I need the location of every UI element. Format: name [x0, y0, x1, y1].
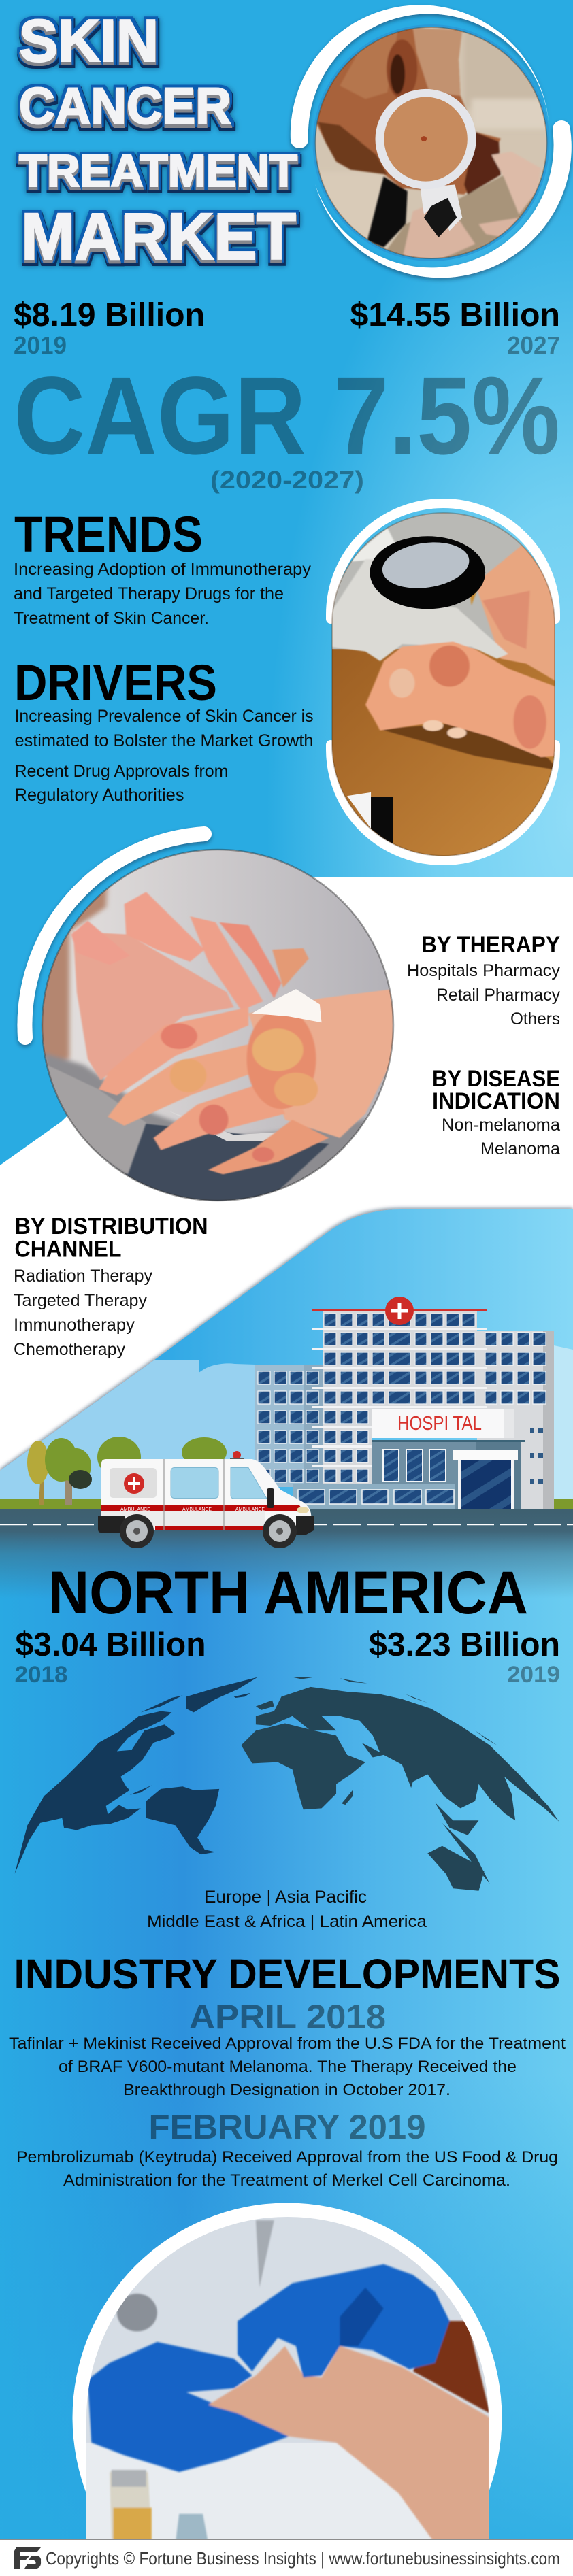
- development: February 2019: Pembrolizumab (Keytruda) Received Approval from the US Food & Drug: [16, 2148, 558, 2167]
- drivers block: Regulatory Authorities: [15, 786, 184, 805]
- segment: by therapy: Retail Pharmacy: [436, 986, 560, 1005]
- trends block: Increasing Adoption of Immunotherapy: [14, 560, 312, 579]
- development: February 2019: Administration for the Treatment of Merkel Cell Carcinoma.: [63, 2171, 510, 2190]
- world map globe: [14, 1677, 559, 1891]
- grass strip: [0, 1499, 573, 1509]
- trends block: [14, 506, 312, 628]
- industry developments heading: INDUSTRY DEVELOPMENTS: [14, 1951, 561, 1997]
- hospital sign text: HOSPI TAL: [397, 1413, 482, 1435]
- regional value 2019: 2019: [507, 1662, 560, 1688]
- pale sky skyline: [0, 1345, 573, 1509]
- segment: by distribution channel: BY DISTRIBUTION: [15, 1214, 208, 1239]
- segment: by disease indication: [432, 1066, 560, 1158]
- market value 2019: 2019: [14, 331, 67, 359]
- regional value 2018: [15, 1626, 206, 1688]
- market value 2027: 2027: [507, 331, 560, 359]
- trends block: TRENDS: [14, 506, 203, 563]
- development: February 2019: [16, 2108, 558, 2190]
- drivers block: estimated to Bolster the Market Growth: [15, 731, 314, 750]
- title: CANCER: [19, 78, 231, 135]
- market value 2019: [14, 297, 205, 359]
- road: [0, 1509, 573, 1599]
- other regions list: Europe | Asia Pacific: [204, 1888, 367, 1907]
- other regions list: [147, 1888, 427, 1931]
- photo: cream on psoriatic hands in circular frame: [24, 834, 402, 1205]
- segment: by therapy: BY THERAPY: [421, 932, 560, 958]
- title: TREATMENT: [19, 146, 297, 197]
- photo: gloved hands examining arm: [72, 2203, 502, 2539]
- ambulance side labels: [120, 1507, 265, 1512]
- regional value 2018: $3.04 Billion: [15, 1626, 206, 1663]
- regional value 2018: 2018: [15, 1662, 68, 1688]
- development: April 2018: of BRAF V600-mutant Melanoma. The Therapy Received the: [59, 2058, 517, 2076]
- segment: by disease indication: INDICATION: [432, 1088, 560, 1114]
- development: April 2018: [9, 1998, 566, 2099]
- title: [19, 7, 297, 273]
- segment: by distribution channel: Chemotherapy: [14, 1340, 125, 1359]
- market value 2027: $14.55 Billion: [350, 297, 560, 333]
- ambulance side labels: AMBULANCE: [120, 1507, 150, 1512]
- segment: by disease indication: BY DISEASE: [432, 1066, 560, 1092]
- segment: by distribution channel: Immunotherapy: [14, 1316, 135, 1335]
- icon: fortune logo: [14, 2547, 41, 2569]
- drivers block: Recent Drug Approvals from: [15, 762, 229, 781]
- panel: header blue background: [0, 0, 573, 1165]
- segment: by disease indication: Non-melanoma: [442, 1116, 560, 1135]
- drivers block: Increasing Prevalence of Skin Cancer is: [15, 707, 313, 726]
- lower background fade: [0, 2075, 573, 2539]
- regional value 2019: $3.23 Billion: [369, 1626, 560, 1663]
- trends block: Treatment of Skin Cancer.: [14, 609, 209, 628]
- title: SKIN: [19, 7, 159, 74]
- CAGR headline: (2020-2027): [210, 466, 364, 494]
- footer bar: [0, 2539, 573, 2576]
- ambulance side labels: AMBULANCE: [182, 1507, 212, 1512]
- regional value 2019: [369, 1626, 560, 1688]
- other regions list: Middle East & Africa | Latin America: [147, 1912, 427, 1931]
- ambulance side labels: AMBULANCE: [235, 1507, 265, 1512]
- segment: by therapy: Hospitals Pharmacy: [407, 961, 560, 980]
- panel: by distribution hill background: [0, 1209, 573, 1517]
- photo: magnifier over neck mole in circular frame: [291, 5, 572, 278]
- drivers block: [14, 654, 314, 805]
- photo: inspection of affected hand in capsule frame: [329, 503, 563, 868]
- illustration: hospital building: [255, 1297, 554, 1509]
- segment: by distribution channel: [14, 1214, 208, 1359]
- segment: by distribution channel: CHANNEL: [15, 1237, 121, 1262]
- development: April 2018: Tafinlar + Mekinist Received Approval from the U.S FDA for the Treatment: [9, 2035, 566, 2053]
- development: April 2018: Breakthrough Designation in October 2017.: [123, 2081, 451, 2099]
- market value 2019: $8.19 Billion: [14, 297, 205, 333]
- drivers block: DRIVERS: [14, 654, 217, 711]
- segment: by distribution channel: Targeted Therapy: [14, 1291, 147, 1310]
- panel: lower blue background: [0, 1509, 573, 2539]
- segment: by disease indication: Melanoma: [480, 1139, 560, 1158]
- illustration: ambulance: [98, 1451, 314, 1548]
- africa and eurasia: [241, 1677, 559, 1891]
- road centre dashes: [0, 1524, 573, 1525]
- segment: by therapy: Others: [510, 1009, 560, 1028]
- development: February 2019: FEBRUARY 2019: [148, 2108, 426, 2146]
- segment: by therapy: [407, 932, 560, 1028]
- americas and greenland: [14, 1677, 258, 1874]
- regional heading: NORTH AMERICA: [48, 1558, 528, 1626]
- title: MARKET: [21, 199, 296, 273]
- development: April 2018: APRIL 2018: [189, 1998, 386, 2036]
- segment: by distribution channel: Radiation Therapy: [14, 1267, 152, 1286]
- market value 2027: [350, 297, 560, 359]
- trends block: and Targeted Therapy Drugs for the: [14, 584, 284, 603]
- illustration: trees: [27, 1437, 227, 1505]
